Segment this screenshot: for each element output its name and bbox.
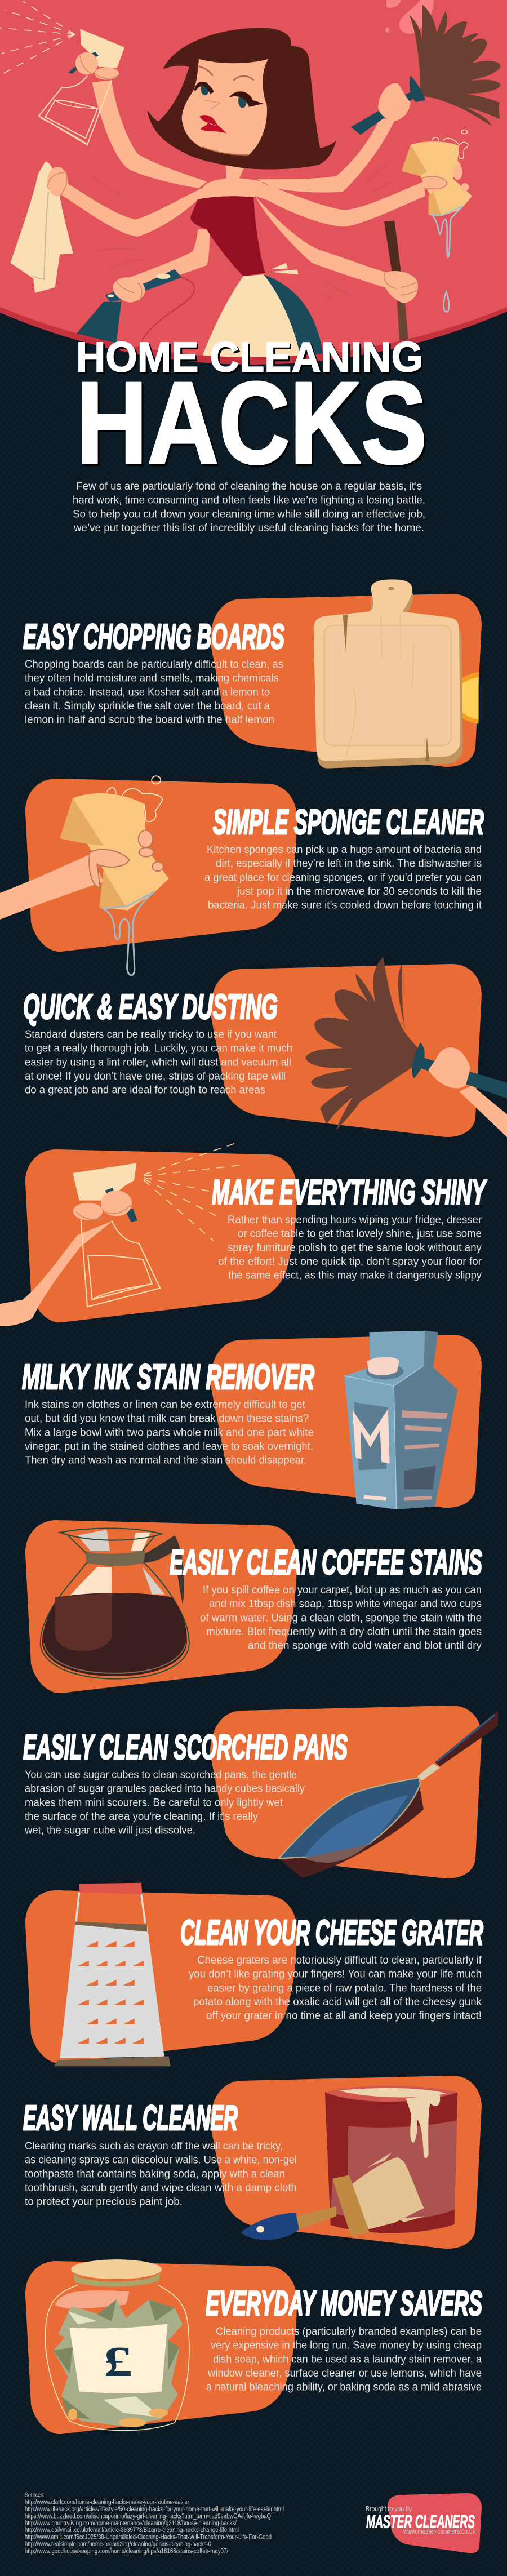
body text: dirt, especially if they’re left in the sink. The dishwasher is [216, 858, 482, 870]
arm: lower right [255, 196, 388, 287]
panel: easy chopping boards [23, 579, 482, 769]
icon: coffee pot [41, 1529, 189, 1679]
body text: Kitchen sponges can pick up a huge amount of bacteria and [207, 844, 482, 856]
heading: EASY CHOPPING BOARDS [23, 618, 284, 656]
body text: bacteria. Just make sure it’s cooled down before touching it [208, 900, 482, 912]
icon: cheese grater [54, 1883, 170, 2066]
sources list: Sources: [25, 2492, 45, 2499]
body text: toothbrush, scrub gently and wipe clean with a damp cloth [25, 2182, 297, 2194]
red blob [388, 2493, 482, 2553]
orange blob [25, 2261, 297, 2434]
eyebrows [198, 66, 254, 81]
sources list: http://www.emlii.com/f5cc1025/38-Unparalleled-Cleaning-Hacks-That-Will-Transform-Your-Life-For-Good [25, 2534, 272, 2541]
arm: lower left [129, 229, 210, 284]
body text [25, 2140, 297, 2208]
icon: hand squeezing sponge [0, 776, 169, 975]
panel: easy wall cleaner [23, 2076, 482, 2249]
orange blob [25, 1149, 297, 1322]
body text [25, 1029, 292, 1096]
body text: a natural bleaching ability, or baking soda as a mild abrasive [206, 2382, 482, 2393]
body text: easier by grating a piece of raw potato. The hardness of the [207, 1982, 482, 1994]
body text: a great place for cleaning sponges, or if you’d prefer you can [204, 872, 482, 883]
mouth [200, 115, 227, 133]
body text [200, 1584, 482, 1652]
sources list: http://www.dailymail.co.uk/femail/article-3639773/Bizarre-cleaning-hacks-change-life.html [25, 2527, 239, 2534]
body text: the same effect, as this may make it dangerously slippy [228, 1270, 482, 1282]
body text: Rather than spending hours wiping your fridge, dresser [228, 1214, 482, 1226]
intro text: hard work, time consuming and often feels like we’re fighting a losing battle. [73, 495, 425, 507]
body text: window cleaner, surface cleaner or use lemons, which have [207, 2368, 482, 2379]
body text: toothpaste that contains baking soda, apply with a clean [25, 2168, 285, 2180]
body text: clean it. Simply sprinkle the salt over the board, cut a [25, 700, 270, 712]
header illustration: multi-armed cleaning woman [0, 0, 507, 379]
body text: Ink stains on clothes or linen can be extremely difficult to get [25, 1399, 306, 1411]
orange blob [210, 1706, 482, 1878]
body text: easier by using a lint roller, which will dust and vacuum all [25, 1056, 291, 1068]
body text: Cleaning marks such as crayon off the wall can be tricky, [25, 2140, 283, 2152]
body text: Mix a large bowl with two parts whole milk and one part white [25, 1427, 314, 1438]
intro text: Few of us are particularly fond of cleaning the house on a regular basis, it’s [77, 481, 422, 492]
dress bodice [190, 196, 265, 276]
panel: everyday money savers [25, 2259, 482, 2434]
orange blob [210, 594, 482, 767]
body text: at once! If you don’t have one, strips of packing tape will [25, 1071, 286, 1082]
body text: abrasion of sugar granules packed into handy cubes basically [25, 1783, 305, 1795]
body text: and then sponge with cold water and blot until dry [248, 1640, 482, 1652]
skirt [264, 274, 323, 355]
sources list: http://www.realsimple.com/home-organizing/cleaning/genius-cleaning-hacks-0 [25, 2541, 211, 2548]
sponge [402, 130, 472, 312]
body text: and mix 1tbsp dish soap, 1tbsp white vinegar and two cups [209, 1598, 482, 1610]
website: www.master-cleaners.co.uk [403, 2527, 475, 2535]
logo: master cleaners [366, 2493, 482, 2553]
icon: pound sign on jar label: £ [104, 2338, 132, 2386]
orange blob [210, 2076, 482, 2249]
body text: a bad choice. Instead, use Kosher salt and a lemon to [25, 686, 270, 698]
sources list: https://www.buzzfeed.com/alisoncaporimo/lazy-girl-cleaning-hacks?utm_term=.ad9eaLwGA#.jfe4wgbaQ [25, 2513, 271, 2520]
body text: mixture. Blot frequently with a dry cloth until the stain goes [206, 1626, 482, 1638]
title: HACKS [76, 358, 427, 488]
orange blob [25, 779, 297, 952]
body text: out, but did you know that milk can break down these stains? [25, 1413, 309, 1425]
body text: Cleaning products (particularly branded examples) can be [216, 2326, 482, 2338]
duster [351, 5, 501, 135]
panel: clean your cheese grater [25, 1883, 483, 2066]
orange blob [210, 964, 482, 1137]
icon: chopping board and lemon [314, 579, 479, 769]
orange blob [25, 1520, 297, 1693]
mop handle [384, 220, 401, 272]
hair [147, 28, 336, 170]
icon: feather duster in hand [305, 957, 507, 1138]
panel: quick and easy dusting [23, 957, 507, 1138]
body text [206, 2326, 482, 2393]
body text: Chopping boards can be particularly difficult to clean, as [25, 659, 283, 670]
sources list: http://www.clark.com/home-cleaning-hacks-make-your-routine-easier [25, 2499, 189, 2506]
body text: just pop it in the microwave for 30 seconds to kill the [237, 886, 482, 898]
motion lines [91, 164, 392, 301]
spray bottle [39, 29, 124, 145]
body text: you don’t like grating your fingers! You can make your life much [189, 1969, 482, 1980]
body text: off your grater in no time at all and keep your fingers intact! [206, 2010, 482, 2022]
body text: potato along with the oxalic acid will get all of the cheesy gunk [193, 1996, 482, 2008]
body text: they often hold moisture and smells, making chemicals [25, 673, 279, 685]
body text [24, 1769, 305, 1837]
body text: to get a really thorough job. Luckily, you can make it much [25, 1043, 292, 1055]
eyes [194, 82, 264, 108]
heading: EASY WALL CLEANER [23, 2099, 238, 2138]
body text: or coffee table to get that lovely shine, just use some [238, 1228, 482, 1240]
panel: easily clean scorched pans [23, 1706, 498, 1878]
body text: as cleaning sprays can discolour walls. Use a white, non-gel [25, 2155, 297, 2166]
nose [204, 100, 220, 110]
arm: middle left [61, 181, 202, 237]
body text: vinegar, put in the stained clothes and leave to soak overnight. [25, 1441, 313, 1453]
icon: paint can and brush [241, 2086, 457, 2240]
orange blob [210, 1335, 482, 1508]
body text: lemon in half and scrub the board with the half lemon [25, 714, 274, 726]
intro text [73, 481, 425, 534]
body text: the surface of the area you're cleaning. If it's really [25, 1811, 258, 1823]
body text: Then dry and wash as normal and the stain should disappear. [25, 1455, 306, 1467]
arm: middle right [259, 181, 425, 227]
rag [10, 162, 73, 293]
body text: makes them mini scourers. Be careful to only lightly wet [25, 1797, 283, 1809]
body text: do a great job and are ideal for tough to reach areas [25, 1085, 265, 1096]
panel: simple sponge cleaner [0, 776, 484, 975]
spray mist [0, 1, 75, 73]
body text [218, 1214, 482, 1282]
body text: dish soap, which can be used as a laundry stain remover, a [213, 2353, 482, 2365]
apron bow [270, 263, 298, 274]
icon: spray bottle in hand [0, 1143, 239, 1326]
body text: of warm water. Using a clean cloth, sponge the stain with the [200, 1612, 482, 1624]
sources list: http://www.countryliving.com/home-maintenance/cleaning/g3118/house-cleaning-hacks/ [25, 2520, 237, 2527]
icon: pink splashes [385, 0, 434, 34]
neck and chest [198, 165, 268, 201]
sources list [25, 2492, 284, 2555]
iron [77, 269, 195, 347]
apron [203, 274, 300, 357]
arm: upper right [257, 118, 394, 193]
icon: milk carton [344, 1331, 457, 1509]
body text: Cheese graters are notoriously difficult to clean, particularly if [197, 1955, 482, 1966]
brought to you by: Brought to you by [366, 2504, 412, 2513]
body text [25, 659, 283, 726]
orange blob [25, 1890, 297, 2063]
body text: If you spill coffee on your carpet, blot up as much as you can [203, 1584, 482, 1596]
body text: very expensive in the long run. Save money by using cheap [211, 2340, 482, 2352]
panel: make everything shiny [0, 1143, 487, 1326]
hand holding mop [383, 271, 418, 303]
heading: MILKY INK STAIN REMOVER [22, 1358, 314, 1397]
body text [189, 1955, 482, 2022]
body text [25, 1399, 314, 1467]
chin shadow [202, 147, 249, 155]
body text: to protect your precious paint job. [25, 2196, 183, 2208]
face [182, 59, 268, 155]
icon: money jar [45, 2259, 189, 2431]
arm: upper left [92, 80, 207, 188]
sources list: http://www.lifehack.org/articles/lifestyle/50-cleaning-hacks-for-your-home-that-will-make-your-life-easier.html [25, 2506, 284, 2513]
intro text: So to help you cut down your cleaning time while still doing an effective job, [73, 508, 425, 520]
body text [204, 844, 482, 912]
body text: wet, the sugar cube will just dissolve. [24, 1825, 195, 1837]
icon: frying pan [279, 1711, 498, 1878]
body text: Standard dusters can be really tricky to use if you want [25, 1029, 277, 1041]
body text: You can use sugar cubes to clean scorched pans, the gentle [25, 1769, 297, 1781]
body text: spray furniture polish to get the same look without any [228, 1242, 482, 1254]
hand holding rag [47, 167, 68, 196]
panel: milky ink stain remover [22, 1331, 482, 1509]
title: HOME CLEANING [76, 334, 423, 381]
intro text: we’ve put together this list of incredibly useful cleaning hacks for the home. [73, 522, 424, 534]
body text: of the effort! Just one quick tip, don’t spray your floor for [218, 1256, 482, 1268]
heading: QUICK & EASY DUSTING [23, 988, 278, 1027]
sources list: http://www.goodhousekeeping.com/home/cleaning/tips/a16166/stains-coffee-may07/ [25, 2548, 229, 2555]
panel: easily clean coffee stains [25, 1520, 482, 1693]
